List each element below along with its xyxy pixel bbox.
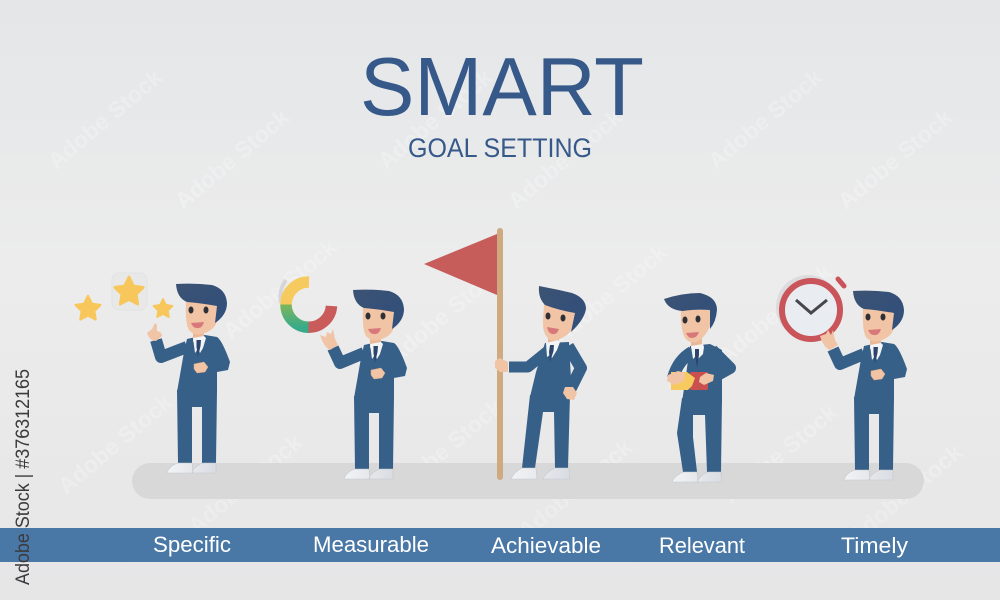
neck	[548, 333, 559, 345]
jacket	[177, 335, 230, 393]
shoes	[344, 469, 393, 479]
eyes	[546, 312, 550, 320]
label: specific: Specific	[153, 532, 231, 557]
raised arm	[333, 348, 364, 363]
open hand	[820, 330, 838, 350]
shirt	[370, 342, 383, 359]
shirt	[691, 344, 704, 359]
figure: specific businessman	[147, 284, 230, 473]
shirt	[870, 343, 883, 360]
watermark pattern: Adobe Stock	[833, 104, 957, 214]
mouth	[686, 332, 699, 338]
ground platform	[132, 463, 924, 499]
labels band	[0, 528, 1000, 562]
hand on pole	[495, 358, 508, 372]
face	[543, 304, 575, 340]
ear	[573, 313, 581, 321]
watermark pattern: Adobe Stock	[183, 429, 307, 539]
star backing card	[112, 273, 147, 310]
eyes	[366, 312, 370, 320]
label: achievable: Achievable	[491, 533, 601, 558]
yellow block	[671, 372, 695, 390]
raised arm	[833, 349, 864, 364]
shoes	[167, 463, 216, 473]
watermark pattern: Adobe Stock	[548, 239, 672, 349]
face	[681, 306, 711, 342]
legs	[354, 396, 394, 469]
watermark pattern: Adobe Stock	[383, 394, 507, 504]
left hand	[667, 371, 685, 385]
legs	[854, 397, 894, 470]
donut shadow	[280, 280, 286, 303]
legs	[522, 395, 570, 468]
figure: measurable businessman	[320, 290, 407, 479]
icon: clock	[776, 275, 844, 339]
ear	[391, 313, 399, 321]
open hand	[320, 329, 338, 350]
watermark pattern: Adobe Stock	[43, 64, 167, 174]
left arm	[509, 350, 549, 367]
right arm	[712, 350, 730, 378]
hair	[664, 293, 717, 329]
icon: red flag on pole	[424, 228, 503, 480]
figure: relevant businessman with puzzle	[664, 293, 730, 482]
tie	[874, 347, 878, 364]
ear	[214, 307, 222, 315]
ear	[707, 312, 715, 320]
watermark pattern: Adobe Stock	[503, 104, 627, 214]
label: measurable: Measurable	[313, 532, 429, 557]
right arm	[568, 346, 581, 390]
hair	[353, 290, 404, 329]
fist	[371, 368, 385, 379]
watermark pattern: Adobe Stock	[170, 104, 294, 214]
label: timely: Timely	[841, 533, 908, 558]
shoes	[672, 472, 722, 482]
mouth	[868, 329, 881, 335]
hair	[853, 291, 904, 330]
hair	[539, 286, 586, 332]
figure: timely businessman	[820, 291, 907, 480]
legs	[177, 390, 217, 463]
eyes	[682, 316, 688, 324]
tie	[196, 340, 201, 357]
shoes	[844, 470, 893, 480]
green segment	[286, 304, 309, 327]
icon: donut chart	[280, 280, 332, 327]
neck	[370, 336, 381, 348]
pole	[497, 228, 503, 480]
tie	[549, 345, 554, 362]
pointing hand	[147, 323, 162, 341]
jacket	[354, 341, 407, 399]
fist	[194, 362, 208, 373]
legs	[677, 398, 722, 472]
stock id side text: Adobe Stock | #376312165	[13, 369, 34, 585]
yellow segment	[286, 282, 309, 304]
eyes	[188, 306, 194, 314]
neck	[870, 337, 881, 349]
tie	[695, 349, 699, 368]
hair	[176, 284, 227, 323]
watermark pattern: Adobe Stock	[843, 439, 967, 549]
right hand	[699, 373, 714, 385]
fist	[871, 369, 885, 380]
flag	[424, 234, 497, 295]
figure: achievable businessman	[495, 286, 586, 479]
mouth	[191, 322, 204, 328]
jacket	[682, 344, 722, 404]
star middle	[115, 277, 143, 304]
watermark pattern: Adobe Stock	[718, 399, 842, 509]
eyes	[866, 314, 870, 320]
shirt	[193, 336, 206, 353]
neck	[193, 330, 204, 342]
title: SMART	[360, 40, 644, 133]
clock face	[782, 281, 840, 339]
watermark pattern: Adobe Stock	[713, 259, 837, 369]
shoes	[511, 468, 570, 479]
watermark pattern: Adobe Stock	[53, 389, 177, 499]
watermark pattern: Adobe Stock	[383, 259, 507, 369]
mouth	[368, 328, 381, 334]
hand on hip	[563, 387, 577, 400]
neck	[691, 336, 702, 348]
left arm	[673, 352, 692, 378]
raised arm	[156, 340, 187, 357]
jacket	[530, 342, 572, 398]
subtitle: GOAL SETTING	[408, 133, 592, 163]
face	[363, 306, 395, 340]
clock shadow	[776, 275, 840, 339]
watermark pattern	[43, 64, 967, 549]
label: relevant: Relevant	[659, 533, 745, 558]
clock button	[838, 279, 844, 286]
red segment	[308, 306, 332, 327]
star right	[153, 299, 173, 317]
red block	[690, 372, 708, 390]
star left	[76, 296, 100, 320]
icon: three stars	[76, 273, 173, 320]
ear	[891, 314, 899, 322]
tie	[374, 346, 378, 363]
clock hands	[796, 300, 827, 313]
shirt	[546, 340, 560, 358]
mouth	[547, 327, 559, 334]
jacket	[854, 342, 907, 400]
watermark pattern: Adobe Stock	[703, 64, 827, 174]
watermark pattern: Adobe Stock	[513, 434, 637, 544]
face	[863, 307, 895, 341]
watermark pattern: Adobe Stock	[373, 64, 497, 174]
watermark pattern: Adobe Stock	[218, 234, 342, 344]
face	[186, 300, 218, 334]
